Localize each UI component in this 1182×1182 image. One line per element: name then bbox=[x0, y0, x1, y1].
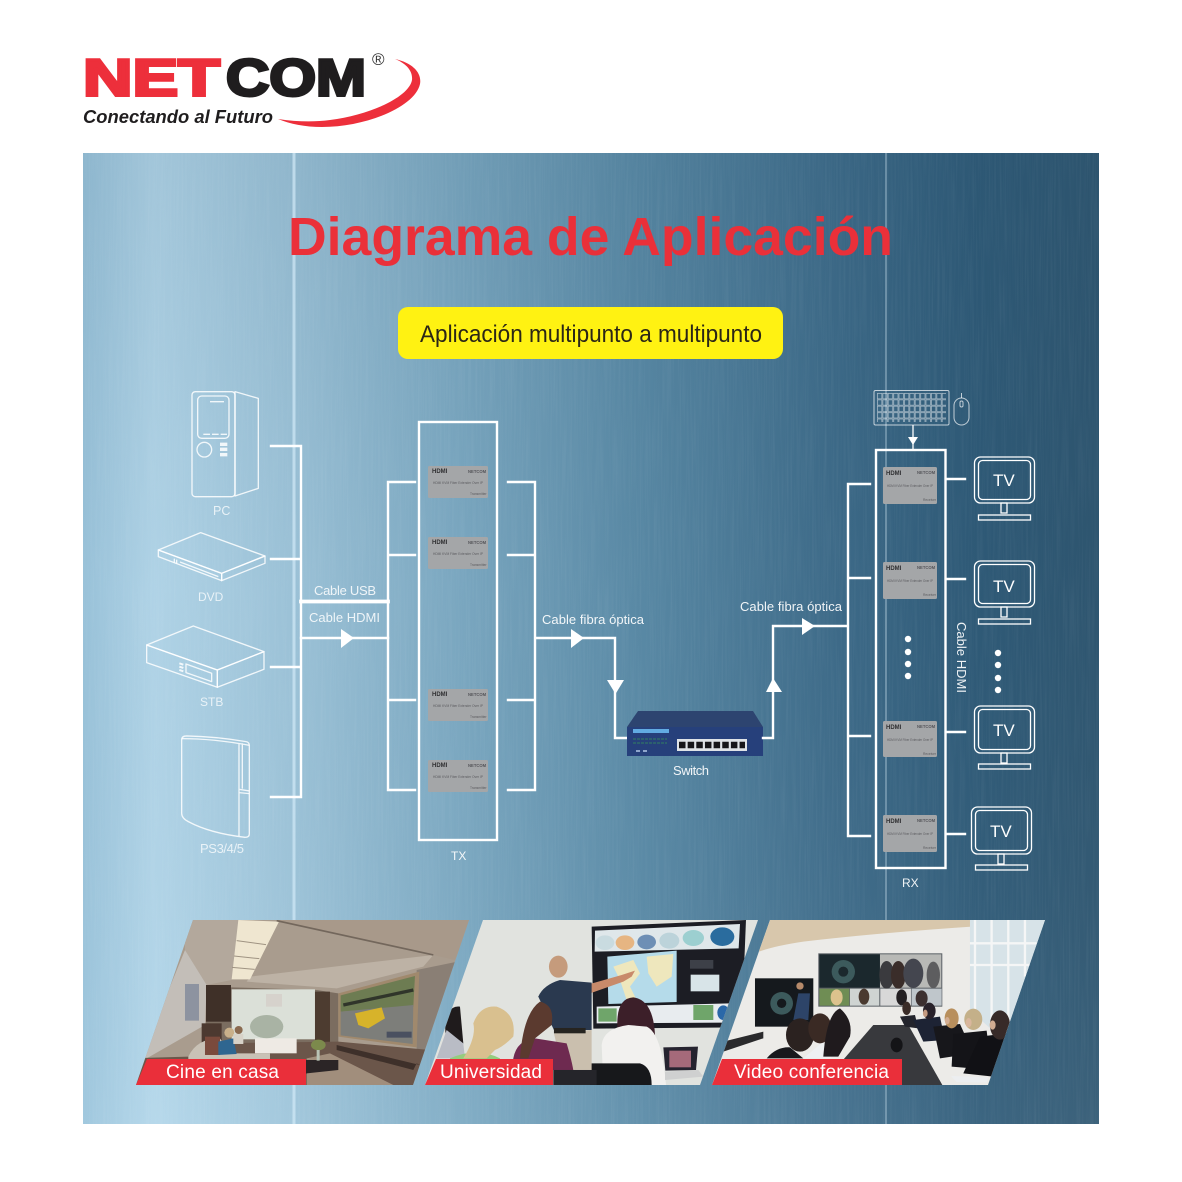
arrow bbox=[341, 629, 354, 648]
module rx 1: HDMI KVM Fiber Extender Over IP bbox=[887, 484, 934, 488]
label PS3/4/5: PS3/4/5 bbox=[200, 841, 244, 856]
icon: keyboard bbox=[874, 390, 949, 425]
module tx 1: NETCOM bbox=[468, 469, 487, 474]
panel: TX box bbox=[419, 422, 497, 840]
icon: TV 1 bbox=[974, 457, 1034, 520]
module rx 3: HDMI KVM Fiber Extender Over IP bbox=[887, 738, 934, 742]
logo swoosh bbox=[278, 59, 420, 127]
logo tagline: Conectando al Futuro bbox=[83, 107, 273, 127]
connector: switch to RX bbox=[740, 484, 870, 836]
module tx 1: HDMI bbox=[432, 469, 448, 475]
icon: TV 2 bbox=[974, 561, 1034, 624]
label Switch: Switch bbox=[673, 763, 709, 778]
label: Universidad bbox=[425, 1059, 553, 1085]
module rx 2: NETCOM bbox=[917, 565, 936, 570]
module rx 2 bbox=[883, 562, 937, 599]
icon: mouse bbox=[954, 393, 969, 425]
icon: TV 3: TV bbox=[993, 721, 1015, 740]
label Cable HDMI vertical: Cable HDMI bbox=[954, 622, 969, 693]
label TX: TX bbox=[451, 849, 466, 863]
icon: TV 1: TV bbox=[993, 471, 1015, 490]
panel: brushed metal background bbox=[83, 153, 1099, 1124]
logo wordmark COM: COM bbox=[226, 50, 366, 108]
label: Video conferencia bbox=[712, 1059, 902, 1085]
ellipsis dots bbox=[905, 636, 911, 679]
icon: DVD player bbox=[158, 533, 265, 581]
label STB: STB bbox=[200, 695, 223, 709]
HDMI output stubs bbox=[947, 479, 965, 834]
ellipsis dots bbox=[995, 650, 1001, 693]
module tx 2: HDMI bbox=[432, 540, 448, 546]
arrow: keyboard to RX bbox=[908, 425, 918, 449]
module tx 3: HDMI bbox=[432, 692, 448, 698]
source devices bbox=[147, 392, 265, 837]
module tx 1 bbox=[428, 466, 488, 498]
module rx 1: NETCOM bbox=[917, 470, 936, 475]
icon: TV 4 bbox=[972, 807, 1032, 870]
module tx 3: NETCOM bbox=[468, 692, 487, 697]
icon: TV 2: TV bbox=[993, 577, 1015, 596]
module tx 4: Transmitter bbox=[470, 786, 487, 790]
label: Cine en casa bbox=[136, 1059, 306, 1085]
arrow up bbox=[766, 678, 782, 692]
arrow right bbox=[802, 618, 815, 635]
icon: PC bbox=[192, 392, 258, 497]
module rx 4: HDMI bbox=[886, 819, 902, 825]
photo: university bbox=[425, 920, 760, 1085]
module tx 4 bbox=[428, 760, 488, 792]
module tx 3 bbox=[428, 689, 488, 721]
module rx 4: HDMI KVM Fiber Extender Over IP bbox=[887, 832, 934, 836]
connector: sources to transmitter bus bbox=[271, 446, 415, 797]
label DVD: DVD bbox=[198, 590, 224, 604]
module tx 2: NETCOM bbox=[468, 540, 487, 545]
module tx 3: Transmitter bbox=[470, 715, 487, 719]
photo: video conference bbox=[710, 920, 1047, 1087]
badge: multipoint application: Aplicación multipunto a multipunto bbox=[420, 321, 762, 348]
label Cable HDMI: Cable HDMI bbox=[309, 610, 380, 625]
label fibre left: Cable fibra óptica bbox=[542, 612, 645, 627]
icon: TV 4: TV bbox=[990, 822, 1012, 841]
module tx 2: HDMI KVM Fiber Extender Over IP bbox=[433, 552, 484, 556]
module rx 4 bbox=[883, 815, 937, 852]
module tx 4: HDMI bbox=[432, 763, 448, 769]
module rx 2: Receiver bbox=[923, 593, 937, 597]
badge: multipoint application bbox=[398, 307, 783, 359]
module rx 1: Receiver bbox=[923, 498, 937, 502]
panel: RX box bbox=[876, 450, 946, 868]
module rx 1 bbox=[883, 467, 937, 504]
icon: PlayStation bbox=[182, 736, 249, 837]
registered mark: ® bbox=[372, 50, 385, 69]
arrow right bbox=[571, 629, 584, 648]
right-side attendees bbox=[900, 1002, 1010, 1077]
module rx 3: HDMI bbox=[886, 725, 902, 731]
label PC: PC bbox=[213, 504, 230, 518]
module tx 2: Transmitter bbox=[470, 563, 487, 567]
logo: Netcom bbox=[83, 50, 420, 127]
module rx 2: HDMI bbox=[886, 566, 902, 572]
label: Cine en casa: Cine en casa bbox=[166, 1062, 279, 1083]
module tx 3: HDMI KVM Fiber Extender Over IP bbox=[433, 704, 484, 708]
label: Video conferencia: Video conferencia bbox=[734, 1062, 889, 1083]
label RX: RX bbox=[902, 876, 919, 890]
device labels bbox=[198, 504, 244, 856]
photo: home cinema bbox=[130, 920, 473, 1087]
module rx 3: NETCOM bbox=[917, 724, 936, 729]
icon: TV 3 bbox=[974, 706, 1034, 769]
label Cable USB: Cable USB bbox=[314, 583, 376, 598]
module rx 2: HDMI KVM Fiber Extender Over IP bbox=[887, 579, 934, 583]
module rx 4: Receiver bbox=[923, 846, 937, 850]
infographic canvas bbox=[83, 53, 1099, 1124]
title: Diagrama de Aplicación bbox=[288, 207, 893, 267]
module rx 3 bbox=[883, 721, 937, 757]
module rx 4: NETCOM bbox=[917, 818, 936, 823]
icon: network switch bbox=[627, 711, 763, 756]
label fibre right: Cable fibra óptica bbox=[740, 599, 843, 614]
module tx 1: HDMI KVM Fiber Extender Over IP bbox=[433, 481, 484, 485]
module rx 3: Receiver bbox=[923, 752, 937, 756]
module tx 4: NETCOM bbox=[468, 763, 487, 768]
arrow down bbox=[607, 680, 624, 694]
module tx 1: Transmitter bbox=[470, 492, 487, 496]
connector: TX to switch bbox=[508, 482, 645, 790]
logo wordmark NET: NET bbox=[83, 50, 220, 108]
module rx 1: HDMI bbox=[886, 471, 902, 477]
module tx 2 bbox=[428, 537, 488, 569]
icon: STB bbox=[147, 626, 264, 687]
module tx 4: HDMI KVM Fiber Extender Over IP bbox=[433, 775, 484, 779]
label: Universidad: Universidad bbox=[440, 1062, 542, 1083]
